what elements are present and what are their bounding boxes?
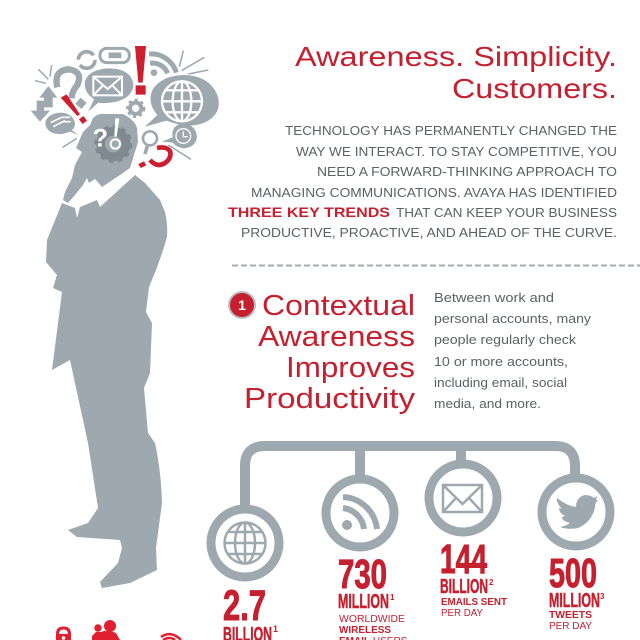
stat: 500 million	[549, 550, 605, 632]
icon: red people	[92, 620, 120, 640]
icon: red question mark	[138, 147, 170, 168]
stat: 144 billion: 144	[440, 536, 487, 582]
stat: 730 million: MILLION	[338, 591, 389, 613]
icon: envelope circle	[429, 464, 497, 532]
intro paragraph: NEED A FORWARD-THINKING APPROACH TO	[317, 165, 617, 179]
stat: 730 million: WORLDWIDE	[339, 614, 405, 625]
section body text: personal accounts, many	[434, 312, 592, 326]
icon: refresh arrows	[78, 52, 95, 68]
thinking man silhouette	[46, 114, 167, 588]
intro paragraph: MANAGING COMMUNICATIONS. AVAYA HAS IDENTIFIED	[251, 186, 617, 200]
icon: globe circle	[211, 509, 279, 577]
connector lines	[245, 446, 575, 510]
section body text: 10 or more accounts,	[434, 355, 568, 369]
title: Customers.	[452, 73, 617, 104]
stat: 730 million: WIRELESS	[339, 625, 391, 636]
icon: red rss	[161, 634, 181, 640]
stat: 144 billion	[440, 536, 507, 619]
icon: globe speech bubble	[145, 75, 219, 127]
icon: head gear with question and exclamation: ?	[93, 125, 108, 153]
icon: red lock	[56, 628, 71, 640]
icon: twitter circle	[542, 478, 610, 546]
stat: 144 billion: BILLION	[440, 576, 488, 598]
stat: 144 billion: EMAILS SENT	[441, 597, 507, 608]
stat: 2.7 billion: 1	[273, 624, 278, 634]
radiating lines	[35, 51, 208, 159]
title: Awareness. Simplicity.	[295, 41, 617, 72]
intro paragraph: THREE KEY TRENDS	[228, 204, 390, 220]
section body text	[434, 291, 592, 411]
title	[295, 41, 617, 104]
section body text: including email, social	[434, 376, 567, 390]
stat: 730 million: 1	[390, 593, 395, 602]
icon: gear	[127, 100, 144, 117]
intro paragraph	[228, 124, 617, 240]
stat: 2.7 billion: 2.7	[223, 582, 266, 630]
intro paragraph: PRODUCTIVE, PROACTIVE, AND AHEAD OF THE CURVE.	[241, 226, 617, 240]
section body text: Between work and	[434, 291, 554, 305]
badge: number 1: 1	[238, 297, 246, 313]
icon: chain link	[100, 48, 129, 63]
intro paragraph: THAT CAN KEEP YOUR BUSINESS	[396, 206, 617, 220]
icon: clock speech bubble	[162, 123, 197, 148]
icon: grey question mark	[57, 69, 87, 109]
stat: 500 million: 3	[600, 592, 605, 601]
icon: red exclamation mark	[135, 46, 146, 95]
section heading: contextual awareness: Awareness	[258, 321, 415, 353]
section body text: people regularly check	[434, 333, 577, 347]
stat: 730 million: 730	[338, 551, 387, 597]
stat: 500 million: MILLION	[549, 590, 600, 612]
stat: 500 million: TWEETS	[549, 610, 592, 621]
section heading: contextual awareness: Contextual	[262, 290, 415, 322]
stat: 144 billion: PER DAY	[441, 608, 483, 619]
badge: number 1	[228, 291, 256, 319]
icon: rss signal	[149, 54, 176, 76]
intro paragraph: WAY WE INTERACT. TO STAY COMPETITIVE, YOU	[296, 145, 617, 159]
stat: 500 million: PER DAY	[549, 621, 592, 632]
section heading: contextual awareness	[244, 290, 416, 415]
icon: chat bubble	[45, 113, 78, 135]
icon: up and down arrows	[31, 86, 57, 122]
icon: envelope speech bubble	[85, 68, 133, 112]
icon: magnifier	[143, 131, 157, 154]
stat: 144 billion: 2	[489, 578, 494, 587]
section heading: contextual awareness: Improves	[286, 352, 415, 384]
icon: red diagonal exclamation	[61, 94, 87, 124]
section body text: media, and more.	[434, 397, 541, 411]
stat: 730 million	[338, 551, 408, 640]
icon: head gear with question and exclamation	[93, 118, 131, 161]
thought cloud of icons	[31, 46, 219, 168]
intro paragraph: TECHNOLOGY HAS PERMANENTLY CHANGED THE	[285, 124, 617, 138]
icon: rss circle	[326, 479, 394, 547]
stat: 500 million: 500	[549, 550, 597, 596]
section heading: contextual awareness: Productivity	[244, 383, 416, 415]
